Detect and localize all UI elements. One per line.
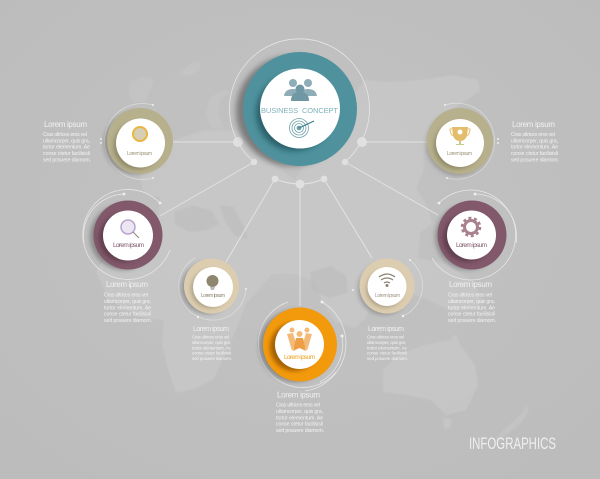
icon: light bulb (206, 275, 218, 290)
connector network (160, 39, 438, 306)
text block: left tan: sed posuere diamom. (192, 356, 232, 361)
icon: sun badge (133, 127, 147, 141)
text block: left purple: tortor elementum. Ae (104, 305, 151, 311)
label: Lorem ipsum (201, 293, 225, 299)
icon: target (290, 118, 314, 138)
node: right tan (352, 258, 423, 317)
node: left tan (179, 258, 247, 320)
text block: right tan: tortor elementum. Ae (367, 345, 408, 350)
text block: orange bottom: ullamcorper, quis gra, (276, 409, 323, 415)
label: Lorem ipsum (456, 242, 487, 249)
text block: top left: conse ctetur facilisisli (43, 151, 90, 157)
text block: left purple: sed posuere diamom. (104, 318, 152, 324)
text block: orange bottom: conse ctetur facilisisli (276, 422, 323, 428)
text block: left tan: ullamcorper, quis gra, (192, 340, 231, 345)
text block: top left (43, 120, 91, 163)
heading: business concept: BUSINESS CONCEPT (261, 106, 338, 115)
text block: top left: Lorem ipsum (44, 120, 87, 129)
text block: top right: Lorem ipsum (512, 120, 555, 129)
text block: top right: tortor elementum. Ae (511, 145, 558, 151)
world map (96, 61, 529, 442)
text block: orange bottom: Lorem ipsum (277, 390, 320, 400)
text block: top left: sed posuere diamom. (43, 157, 91, 163)
text block: right purple: conse ctetur facilisisli (448, 312, 495, 318)
text block: left tan: conse ctetur facilisisli (192, 351, 231, 356)
node: left purple (83, 189, 170, 279)
icon: gear (462, 218, 480, 236)
text block: orange bottom: tortor elementum. Ae (276, 415, 323, 421)
icon: people group (287, 328, 312, 351)
text block: left purple: conse ctetur facilisisli (104, 312, 151, 318)
text block: top right (511, 120, 559, 163)
text block: left tan: tortor elementum. Ae (192, 345, 232, 350)
text block: left purple: Cras ultrices eros vel (104, 293, 148, 299)
node: top left (100, 104, 173, 180)
text block: right tan (367, 326, 408, 361)
icon: magnifier (121, 220, 139, 238)
node: top right (426, 103, 499, 179)
text block: top right: conse ctetur facilisisli (511, 151, 558, 157)
node: right purple (432, 190, 517, 280)
text block: left tan (192, 326, 232, 361)
icon: trophy (450, 127, 470, 145)
icon: business people (284, 79, 317, 101)
text block: left tan: Lorem ipsum (193, 326, 229, 333)
text block: right purple (448, 280, 496, 324)
text block: left purple: Lorem ipsum (106, 280, 148, 289)
text block: right purple: Lorem ipsum (449, 280, 492, 289)
text block: left purple (104, 280, 152, 324)
icon: wifi (379, 274, 395, 287)
text block: top right: sed posuere diamom. (511, 157, 559, 163)
text block: top right: Cras ultrices eros vel (511, 132, 555, 138)
text block: right purple: tortor elementum. Ae (448, 305, 495, 311)
label: Lorem ipsum (375, 293, 400, 299)
text block: orange bottom: Cras ultrices eros vel (276, 403, 320, 409)
node: orange bottom (258, 300, 346, 391)
label: Lorem ipsum (447, 151, 472, 157)
text block: right purple: ullamcorper, quis gra, (448, 299, 495, 305)
text block: right tan: ullamcorper, quis gra, (367, 340, 406, 345)
text block: left tan: Cras ultrices eros vel (192, 335, 229, 340)
text block: right purple: Cras ultrices eros vel (448, 293, 492, 299)
label: Lorem ipsum (284, 354, 315, 361)
text block: right tan: sed posuere diamom. (367, 356, 408, 361)
main circle: business concept (236, 52, 357, 166)
text block: left purple: ullamcorper, quis gra, (104, 299, 151, 305)
text block: orange bottom: sed posuere diamom. (276, 428, 324, 434)
title: infographics: INFOGRAPHICS (469, 435, 556, 453)
text block: top right: ullamcorper, quis gra, (511, 138, 558, 144)
text block: top left: Cras ultrices eros vel (43, 132, 87, 138)
text block: right tan: conse ctetur facilisisli (367, 351, 407, 356)
text block: right tan: Cras ultrices eros vel (367, 335, 404, 340)
text block: right purple: sed posuere diamom. (448, 318, 496, 324)
text block: right tan: Lorem ipsum (368, 326, 404, 333)
label: Lorem ipsum (113, 242, 144, 249)
text block: top left: tortor elementum. Ae (43, 145, 90, 151)
text block: orange bottom (276, 390, 324, 434)
label: Lorem ipsum (127, 151, 152, 157)
text block: top left: ullamcorper, quis gra, (43, 138, 90, 144)
